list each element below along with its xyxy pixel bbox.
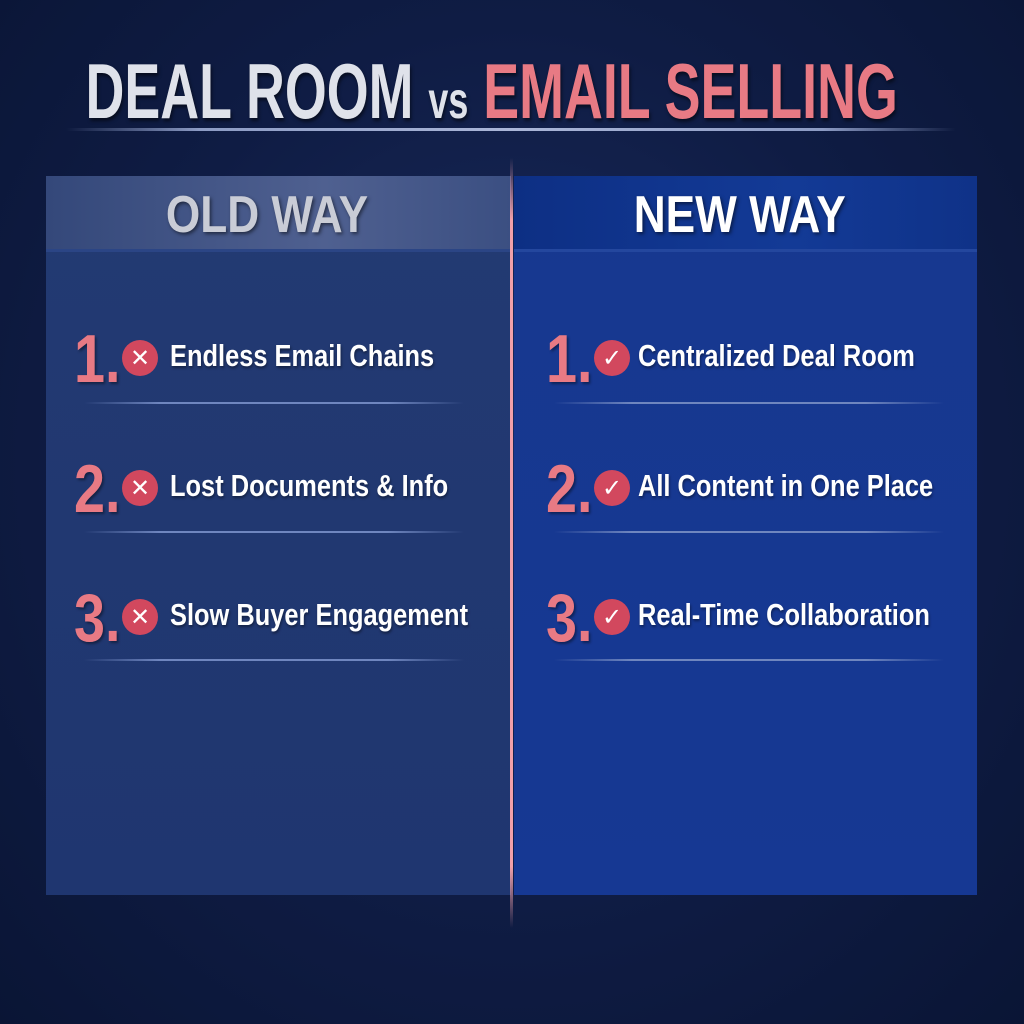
item 1: ✕ bbox=[130, 344, 150, 372]
header: old way: OLD WAY bbox=[165, 186, 368, 244]
header: new way bbox=[514, 176, 977, 252]
item 2: 2. bbox=[74, 451, 121, 527]
item 1 bbox=[546, 321, 916, 397]
header: old way bbox=[46, 176, 511, 252]
item 2: 2. bbox=[546, 451, 593, 527]
item 1: ✓ bbox=[602, 344, 622, 372]
item 2 bbox=[74, 451, 449, 527]
item 3: Slow Buyer Engagement bbox=[170, 597, 468, 632]
item 1: Endless Email Chains bbox=[170, 338, 434, 373]
item 1 bbox=[74, 321, 435, 397]
title: DEAL ROOM vs EMAIL SELLING bbox=[85, 47, 898, 135]
header: new way: NEW WAY bbox=[633, 186, 846, 244]
item 2 bbox=[546, 451, 934, 527]
item 2: ✕ bbox=[130, 474, 150, 502]
item 1: Centralized Deal Room bbox=[638, 338, 915, 373]
panel: old way bbox=[46, 176, 511, 895]
item 3 bbox=[74, 580, 470, 656]
item 2: All Content in One Place bbox=[638, 468, 933, 503]
item 1: 1. bbox=[546, 321, 593, 397]
item 3: ✓ bbox=[602, 603, 622, 631]
item 2: ✓ bbox=[602, 474, 622, 502]
item 2: Lost Documents & Info bbox=[170, 468, 448, 503]
item 1: 1. bbox=[74, 321, 121, 397]
panel: new way bbox=[514, 176, 977, 895]
item 3 bbox=[546, 580, 930, 656]
item 3: ✕ bbox=[130, 603, 150, 631]
item 3: 3. bbox=[546, 580, 593, 656]
item 3: 3. bbox=[74, 580, 121, 656]
item 3: Real-Time Collaboration bbox=[638, 597, 930, 632]
divider line bbox=[510, 158, 513, 928]
